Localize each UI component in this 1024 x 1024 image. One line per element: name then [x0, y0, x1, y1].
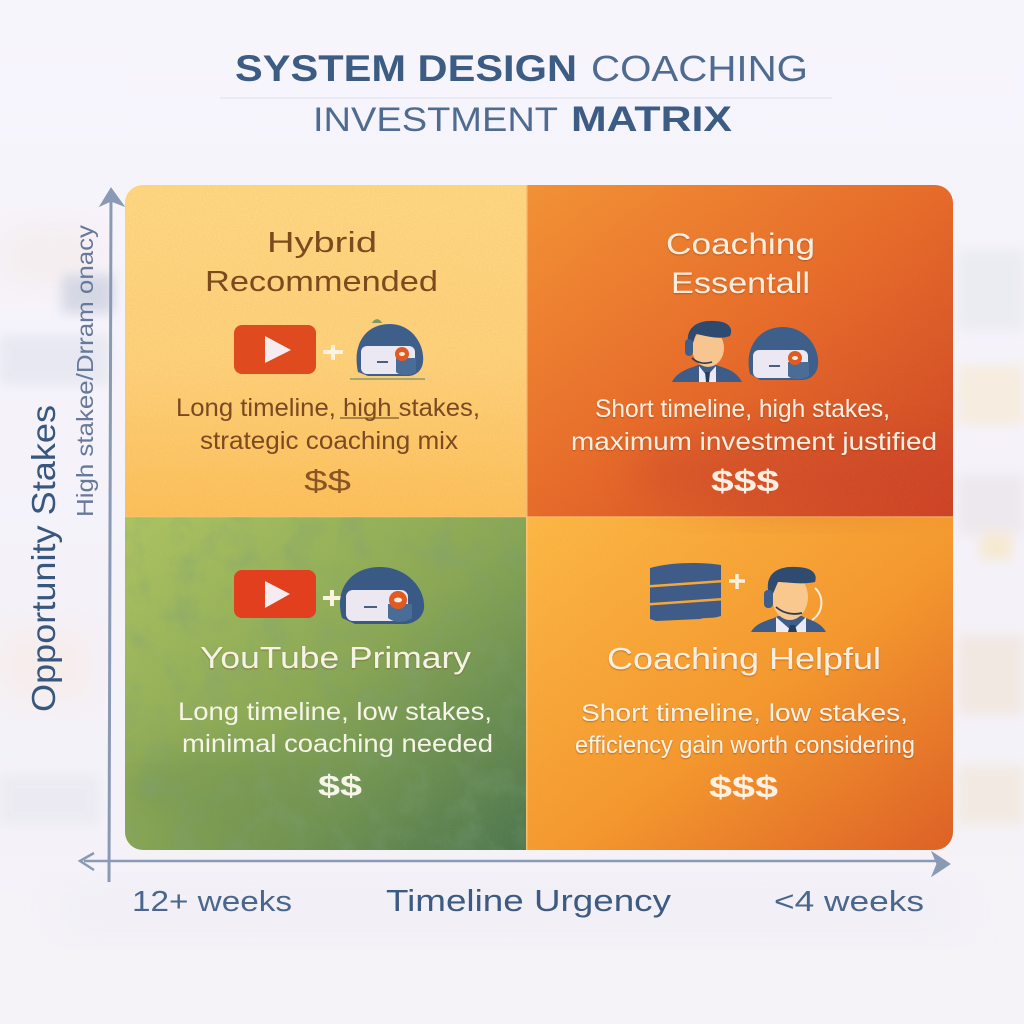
cost: two dollars: $$ — [318, 770, 362, 803]
cost: two dollars: $$ — [304, 465, 351, 498]
title — [235, 48, 808, 139]
description — [176, 394, 480, 455]
heading: coaching essential: Coaching — [666, 228, 815, 261]
description: efficiency gain worth considering — [575, 732, 915, 759]
x axis labels: 12+ weeks — [132, 886, 292, 918]
title: MATRIX — [571, 100, 733, 139]
description — [571, 395, 937, 456]
description: Short timeline, high stakes, — [595, 395, 890, 423]
panel: youtube primary — [178, 567, 493, 803]
heading: coaching essential — [666, 228, 815, 300]
heading: coaching essential: Essentall — [671, 267, 810, 300]
description: Long timeline, low stakes, — [178, 698, 492, 726]
cost: three dollars: $$$ — [711, 463, 779, 498]
title: INVESTMENT — [313, 101, 558, 139]
description: minimal coaching needed — [182, 730, 493, 758]
description: Short timeline, low stakes, — [581, 700, 908, 727]
icon: coaching robot headset — [350, 319, 425, 379]
title: SYSTEM DESIGN — [235, 48, 577, 89]
icon: plus — [729, 574, 745, 589]
heading: youtube primary: YouTube Primary — [200, 640, 472, 675]
y axis title: Opportunity Stakes — [25, 405, 62, 712]
panel: coaching helpful — [575, 563, 915, 804]
icon: coaching robot headset — [749, 327, 818, 380]
icon: video play button — [234, 325, 316, 374]
background blurred blotches — [0, 225, 1024, 935]
icon: system database — [650, 563, 721, 621]
heading: hybrid recommended: Recommended — [205, 266, 438, 298]
description — [575, 700, 915, 759]
y axis arrow — [100, 188, 124, 882]
cost: three dollars: $$$ — [709, 769, 778, 804]
heading: hybrid recommended — [205, 227, 438, 298]
heading: hybrid recommended: Hybrid — [267, 227, 377, 259]
panel: coaching essential — [571, 228, 937, 498]
icon: video play button — [234, 570, 316, 618]
x axis labels — [132, 883, 924, 918]
heading: coaching helpful: Coaching Helpful — [607, 641, 881, 676]
description — [178, 698, 493, 758]
x axis labels: Timeline Urgency — [386, 883, 672, 918]
matrix panels — [120, 185, 970, 850]
icon: plus — [323, 590, 341, 606]
icon: coaching robot headset — [340, 567, 424, 624]
description: Long timeline, high stakes, — [176, 394, 480, 422]
title: COACHING — [591, 48, 808, 89]
y axis subtitle: High stakee/Drram onacy — [72, 224, 98, 517]
icon: plus — [323, 345, 343, 360]
x axis arrow — [80, 852, 950, 876]
x axis labels: <4 weeks — [774, 886, 924, 918]
icon: coach with headset — [672, 321, 742, 382]
description: strategic coaching mix — [200, 427, 459, 455]
panel: hybrid recommended — [176, 227, 480, 498]
icon: coach with headset — [751, 567, 826, 632]
description: maximum investment justified — [571, 428, 937, 456]
